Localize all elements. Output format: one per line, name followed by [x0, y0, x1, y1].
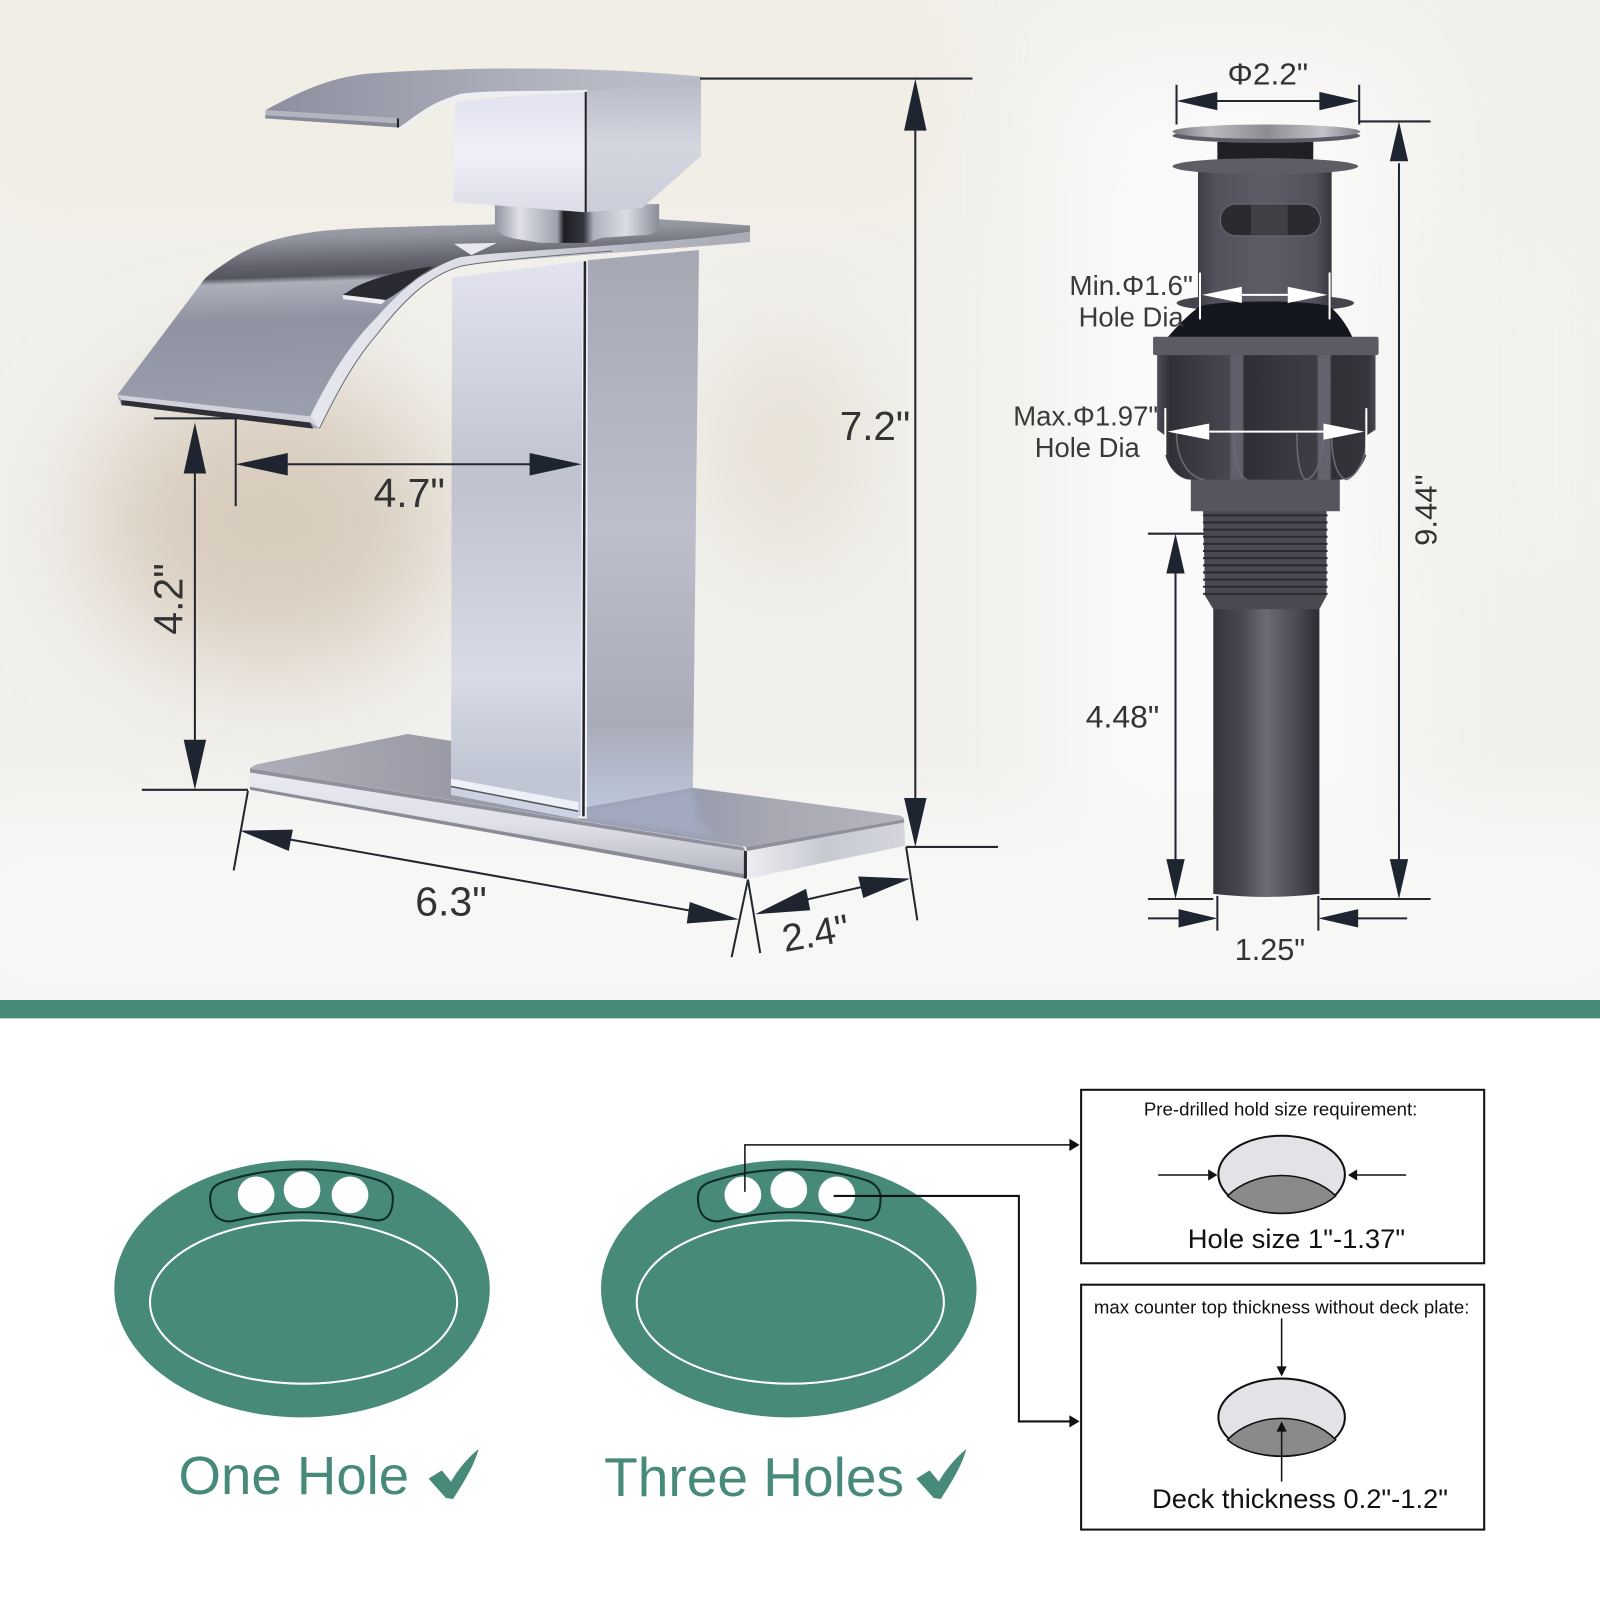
label: three holes: Three Holes — [604, 1446, 904, 1508]
drain threads — [1203, 510, 1328, 609]
icon: deck cross-section — [1218, 1379, 1345, 1456]
callout: hole size: Hole size 1"-1.37" — [1188, 1224, 1405, 1254]
thickness arrows — [1277, 1318, 1287, 1482]
connector arrow: hole size — [745, 1139, 1080, 1192]
callout: deck thickness — [1081, 1285, 1484, 1530]
min hole diameter: Hole Dia — [1079, 302, 1184, 333]
icon: hole cross-section — [1218, 1136, 1345, 1213]
dimension 4.2 inch: 4.2" — [146, 563, 192, 635]
label: one hole: One Hole — [179, 1446, 409, 1506]
dimension 9.44 inch: 9.44" — [1410, 474, 1444, 546]
dimension 4.2 inch — [142, 422, 248, 790]
photo background — [0, 0, 1600, 1031]
dimension 6.3 inch — [234, 791, 748, 957]
drain collar — [1191, 473, 1340, 511]
dimension 4.7 inch — [154, 417, 582, 516]
pop-up drain — [1153, 124, 1379, 897]
sink: one hole — [114, 1160, 490, 1417]
faucet body — [451, 250, 699, 816]
deck plate — [249, 734, 905, 879]
dimension 2.2 inch — [1177, 58, 1359, 124]
teal divider bar — [0, 1000, 1600, 1018]
callout: deck thickness: Deck thickness 0.2"-1.2" — [1152, 1484, 1448, 1514]
body seam — [581, 260, 588, 818]
callout: deck thickness: max counter top thickness without deck plate: — [1094, 1296, 1469, 1317]
handle — [265, 68, 701, 212]
spout — [117, 218, 750, 429]
drain upper body — [1153, 124, 1379, 355]
dimension 2.4 inch: 2.4" — [779, 907, 853, 961]
dimension 2.4 inch — [748, 847, 917, 961]
faucet dimension lines — [142, 79, 998, 961]
min hole diameter — [1069, 270, 1330, 333]
dimension 7.2 inch — [700, 79, 998, 847]
dimension 1.25 inch — [1148, 896, 1407, 967]
dimension 4.48 inch: 4.48" — [1086, 699, 1159, 735]
max hole diameter: Max.Φ1.97" — [1013, 401, 1158, 432]
drain tube — [1213, 604, 1319, 897]
dimension 2.2 inch: Φ2.2" — [1228, 58, 1308, 92]
dimension 4.7 inch: 4.7" — [373, 470, 445, 516]
dimension 7.2 inch: 7.2" — [840, 403, 910, 449]
width arrows — [1158, 1169, 1406, 1181]
lower white panel — [0, 1017, 1600, 1600]
max hole diameter — [1013, 401, 1366, 463]
dimension 4.48 inch — [1086, 534, 1213, 899]
drain fins — [1157, 352, 1376, 480]
dimension 9.44 inch — [1320, 121, 1444, 899]
drain dimension lines — [1013, 58, 1444, 967]
sink: three holes — [601, 1160, 977, 1417]
faucet — [117, 68, 905, 879]
dimension 6.3 inch: 6.3" — [415, 878, 487, 924]
max hole diameter: Hole Dia — [1035, 432, 1140, 463]
min hole diameter: Min.Φ1.6" — [1069, 270, 1193, 301]
collar — [495, 204, 659, 243]
callout: hole size — [1081, 1090, 1484, 1263]
connector arrow: deck thickness — [834, 1196, 1080, 1428]
callout: hole size: Pre-drilled hold size requirement: — [1144, 1098, 1417, 1119]
dimension 1.25 inch: 1.25" — [1235, 933, 1305, 967]
